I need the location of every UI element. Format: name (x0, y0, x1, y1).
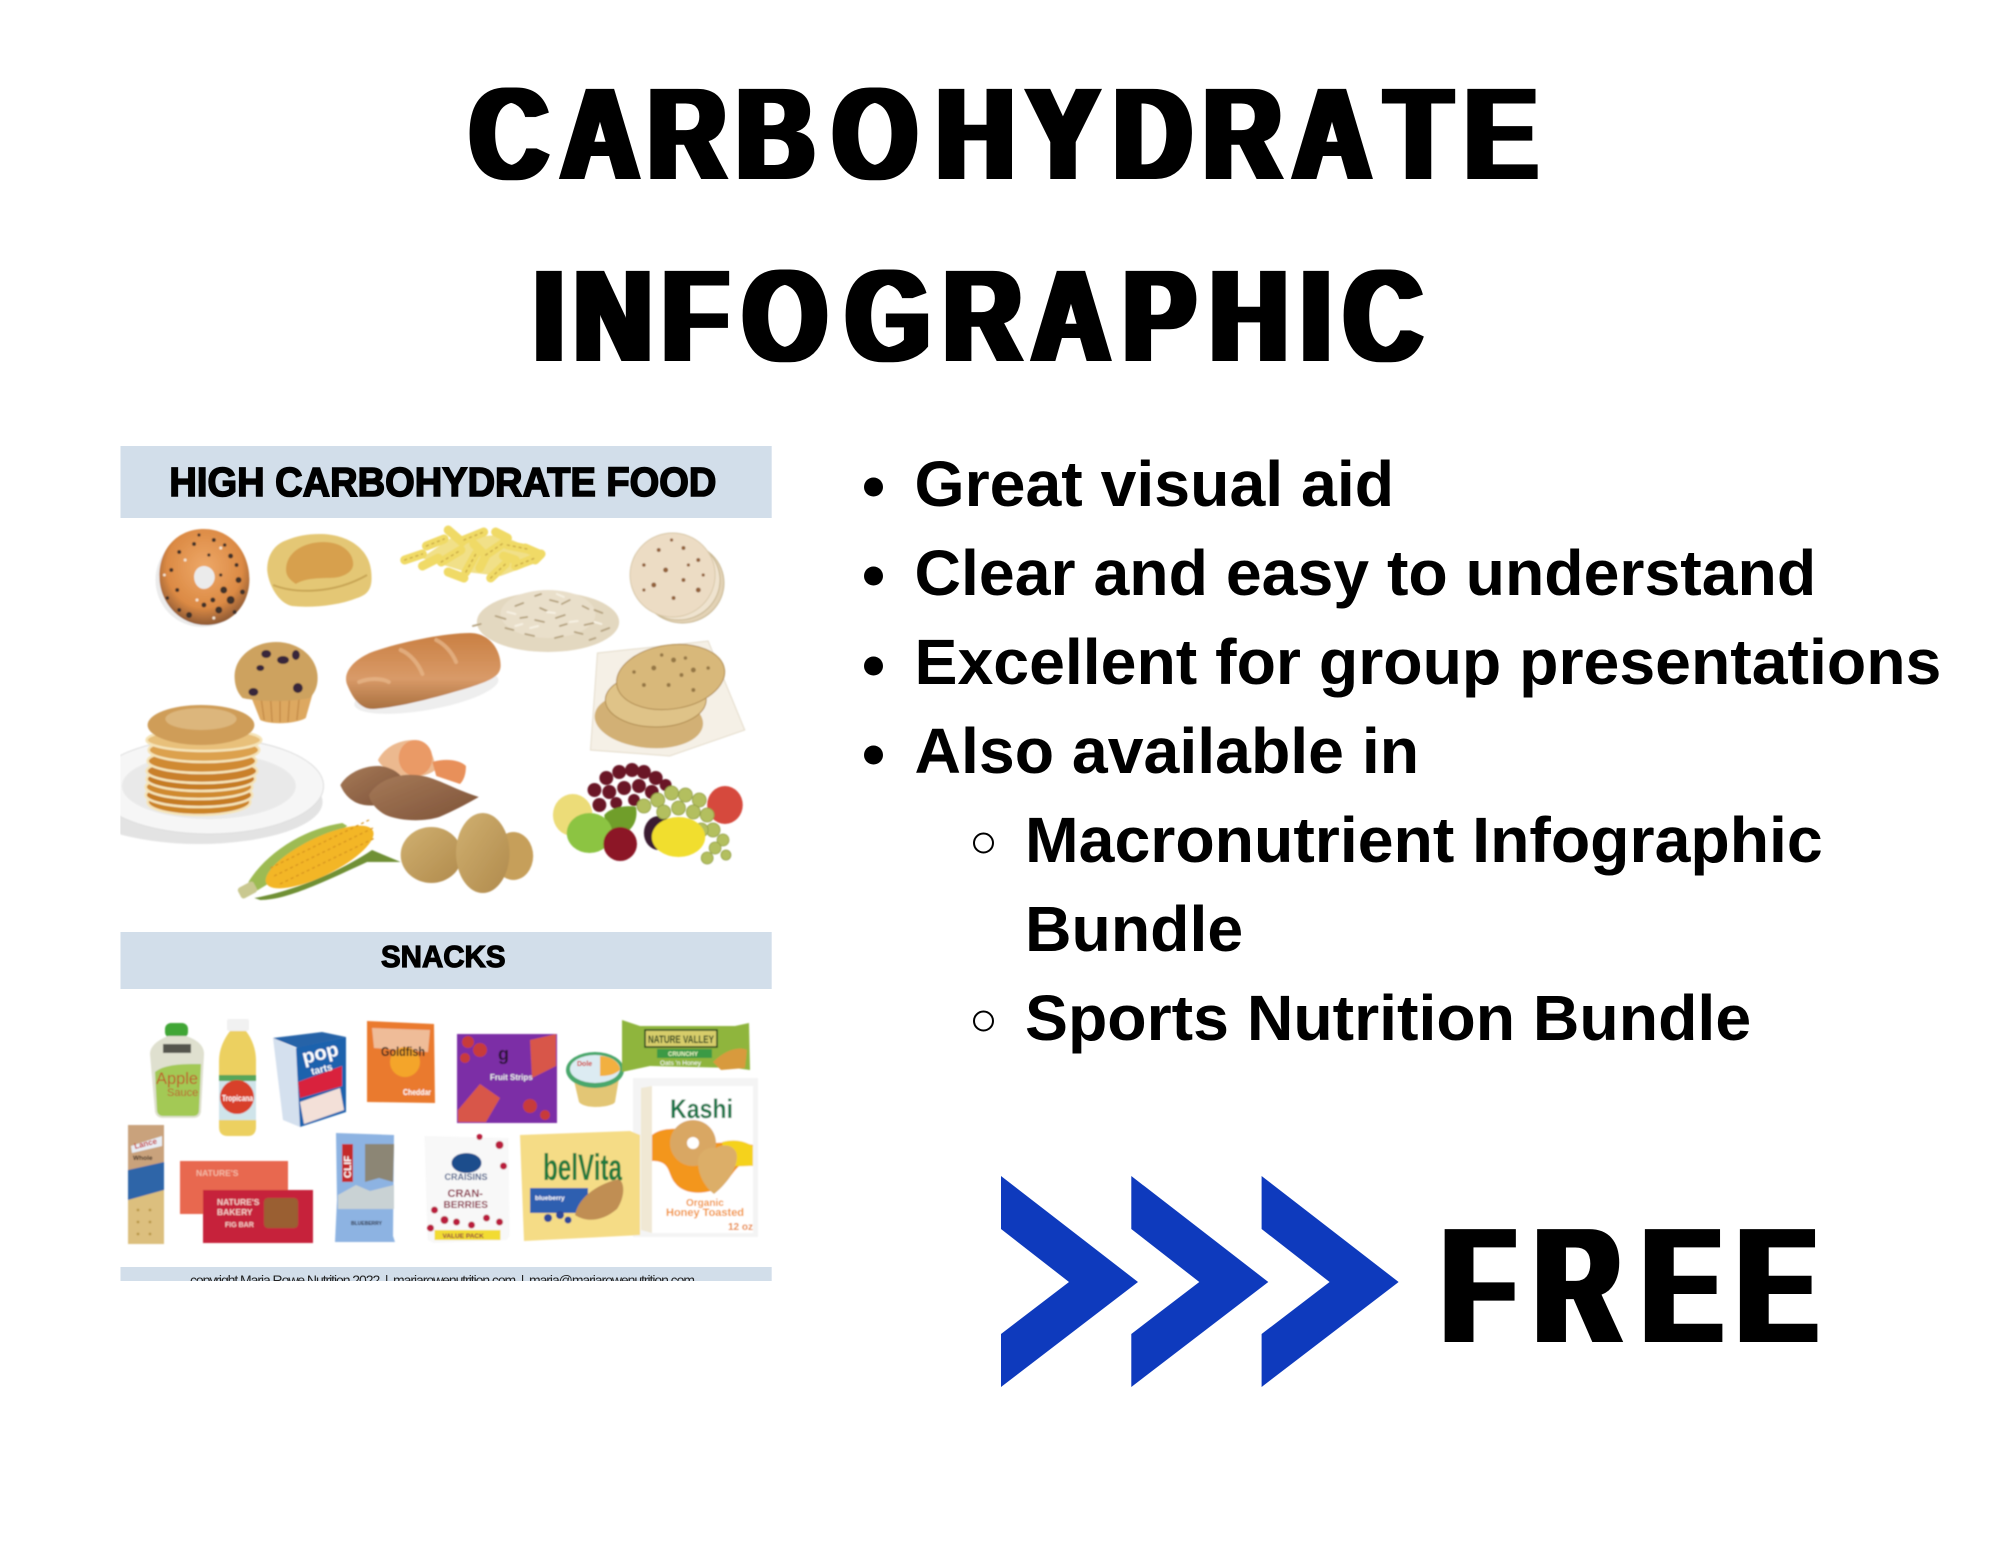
pop tarts box (273, 1032, 346, 1127)
lance crackers (128, 1125, 164, 1244)
free label: FREE (1443, 1195, 1816, 1378)
bagel (155, 529, 249, 627)
juice bottle (219, 1019, 256, 1136)
tortilla stack (630, 533, 724, 623)
mixed fruit (553, 763, 743, 864)
lance crackers: Lance (133, 1136, 158, 1151)
bullet: clear and easy: Clear and easy to understand (914, 537, 1816, 609)
sub-bullet: macronutrient bundle (974, 804, 1823, 965)
kashi box: Honey Toasted (666, 1207, 744, 1219)
fruit strips box: Fruit Strips (490, 1073, 533, 1082)
fruit strips box (457, 1034, 557, 1123)
kashi box (633, 1078, 758, 1237)
bullet list (864, 448, 1941, 1054)
sub-bullet: macronutrient bundle: Bundle (1025, 893, 1243, 965)
pancakes on plate (75, 705, 324, 844)
craisins bag: VALUE PACK (442, 1233, 484, 1240)
footer band with copyright: copyright Maria Rowe Nutrition 2022 | mariarowenutrition.com | maria@mariarowenutrition.com (190, 1272, 695, 1288)
granola bar: NATURE VALLEY (648, 1034, 714, 1046)
potatoes (401, 813, 533, 893)
arrows: three chevrons (1001, 1176, 1399, 1387)
sub-bullet: sports nutrition bundle: Sports Nutrition Bundle (1025, 982, 1751, 1054)
goldfish bag: Cheddar (403, 1088, 431, 1097)
bullet: also available in: Also available in (914, 715, 1419, 787)
juice bottle: Tropicana (222, 1093, 253, 1103)
snack photos group (128, 1019, 758, 1244)
header band: high carbohydrate food (120, 446, 772, 518)
title: CARBOHYDRATE (470, 62, 1537, 207)
header band: high carbohydrate food: HIGH CARBOHYDRATE FOOD (169, 459, 716, 505)
lance crackers: Whole (133, 1155, 153, 1162)
kashi box: Kashi (670, 1094, 733, 1124)
pasta (405, 530, 541, 578)
english muffin (267, 534, 372, 607)
nature's bakery bars: NATURE'S (196, 1168, 239, 1178)
granola bar (622, 1020, 750, 1072)
rice pile (473, 590, 619, 652)
nature's bakery bars: NATURE'S (217, 1197, 260, 1207)
nature's bakery bars (180, 1161, 313, 1243)
apple sauce pouch: Apple (156, 1069, 198, 1088)
food photos group (75, 529, 745, 900)
belvita box: blueberry (535, 1195, 565, 1202)
naan on plate (591, 638, 745, 756)
header band: snacks: SNACKS (381, 939, 506, 974)
pop tarts box: pop (300, 1039, 341, 1069)
craisins bag: CRAISINS (444, 1172, 488, 1182)
belvita box (520, 1131, 640, 1241)
pop tarts box: tarts (310, 1062, 334, 1078)
fruit cup (566, 1052, 624, 1107)
kashi box: Organic (686, 1198, 724, 1209)
nature's bakery bars: FIG BAR (225, 1222, 254, 1229)
footer band with copyright (120, 1267, 772, 1281)
title: INFOGRAPHIC (534, 244, 1422, 389)
bullet: great visual aid: Great visual aid (914, 448, 1394, 520)
clif bar: BLUEBERRY (351, 1221, 383, 1227)
title (470, 62, 1537, 389)
fruit strips box: g (498, 1044, 509, 1064)
kashi box: 12 oz (728, 1222, 753, 1233)
header band: snacks (120, 932, 772, 989)
craisins bag: CRAN- (448, 1188, 483, 1200)
apple sauce pouch (150, 1023, 204, 1118)
panel: food chart (75, 446, 772, 1288)
apple sauce pouch: Sauce (167, 1087, 198, 1099)
bullet: excellent for group: Excellent for group presentations (914, 626, 1941, 698)
clif bar: CLIF (343, 1156, 354, 1178)
clif bar (335, 1133, 395, 1242)
bread loaf (346, 633, 502, 723)
sub-bullet: macronutrient bundle: Macronutrient Infographic (1025, 804, 1823, 876)
craisins bag: BERRIES (444, 1200, 488, 1211)
fruit cup: Dole (577, 1061, 592, 1068)
belvita box: belVita (543, 1147, 622, 1188)
craisins bag (424, 1134, 510, 1243)
granola bar: CRUNCHY (668, 1052, 698, 1058)
blueberry muffin (235, 642, 318, 723)
granola bar: Oats 'n Honey (660, 1060, 702, 1067)
corn (237, 814, 401, 900)
goldfish bag: Goldfish (381, 1044, 425, 1059)
sweet potatoes (340, 740, 479, 820)
goldfish bag (367, 1021, 435, 1103)
nature's bakery bars: BAKERY (217, 1207, 253, 1217)
